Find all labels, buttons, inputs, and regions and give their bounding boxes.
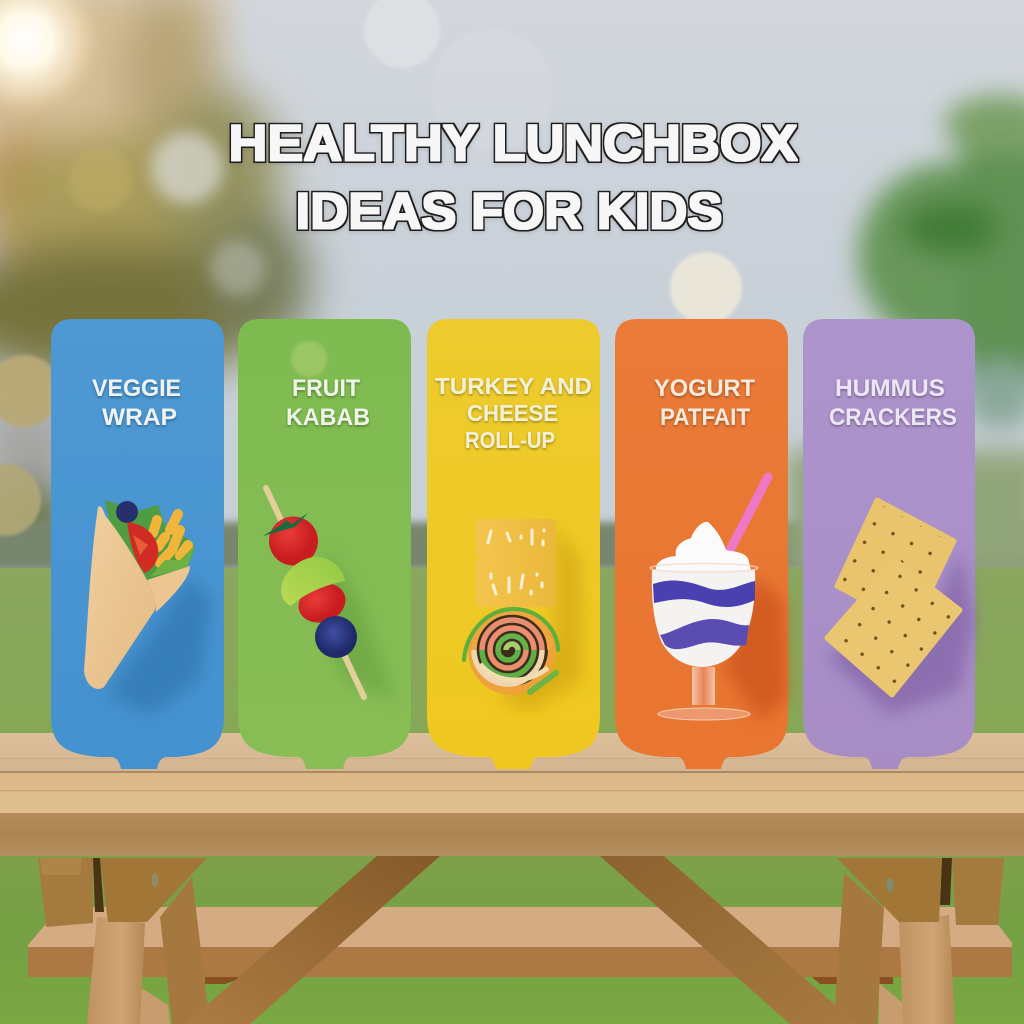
table front edge bbox=[0, 813, 1024, 856]
label: turkey and cheese roll-up bbox=[435, 373, 592, 453]
label: veggie wrap: VEGGIE bbox=[92, 375, 181, 402]
icon: kabab bbox=[263, 488, 395, 700]
label: hummus crackers bbox=[829, 375, 957, 431]
label: turkey and cheese roll-up: TURKEY AND bbox=[435, 373, 592, 399]
icon: crackers bbox=[825, 500, 975, 715]
label: hummus crackers: HUMMUS bbox=[835, 375, 945, 402]
label: fruit kabab: FRUIT bbox=[292, 375, 360, 402]
label: yogurt parfait: PATFAIT bbox=[660, 404, 750, 431]
picnic table bbox=[0, 733, 1024, 1024]
panel: turkey and cheese roll-up bbox=[427, 319, 600, 769]
panel: veggie wrap bbox=[51, 319, 224, 769]
panel background purple bbox=[803, 319, 975, 769]
label: turkey and cheese roll-up: ROLL-UP bbox=[465, 427, 555, 453]
background: left trees bbox=[0, 0, 310, 560]
title: HEALTHY LUNCHBOX bbox=[228, 114, 798, 172]
bokeh on green panel bbox=[291, 341, 327, 377]
label: yogurt parfait: YOGURT bbox=[654, 375, 755, 402]
icon: parfait bbox=[650, 477, 786, 720]
label: fruit kabab bbox=[286, 375, 370, 431]
title bbox=[228, 114, 798, 240]
title: IDEAS FOR KIDS bbox=[296, 182, 722, 240]
label: yogurt parfait bbox=[654, 375, 755, 431]
panel background blue bbox=[51, 319, 224, 769]
label: veggie wrap: WRAP bbox=[102, 404, 177, 431]
background: lawn bbox=[0, 568, 1024, 740]
icon: wrap bbox=[84, 500, 212, 715]
background: right tree bbox=[858, 95, 1024, 429]
panel background yellow bbox=[427, 319, 600, 769]
label: fruit kabab: KABAB bbox=[286, 404, 370, 431]
panel background orange bbox=[615, 319, 788, 769]
label: turkey and cheese roll-up: CHEESE bbox=[467, 400, 558, 426]
table top surface bbox=[0, 733, 1024, 813]
panel: hummus crackers bbox=[803, 319, 975, 769]
icon: roll-up bbox=[464, 519, 582, 710]
table legs and braces bbox=[38, 856, 1004, 1024]
panel background green bbox=[238, 319, 411, 769]
background: sun glow bbox=[0, 0, 103, 118]
label: hummus crackers: CRACKERS bbox=[829, 404, 957, 431]
bench bbox=[28, 907, 1012, 984]
background: tree line bbox=[0, 522, 1024, 570]
panel: fruit kabab bbox=[238, 319, 411, 769]
bokeh lights bbox=[0, 0, 742, 536]
label: veggie wrap bbox=[92, 375, 181, 431]
panel: yogurt parfait bbox=[615, 319, 788, 769]
